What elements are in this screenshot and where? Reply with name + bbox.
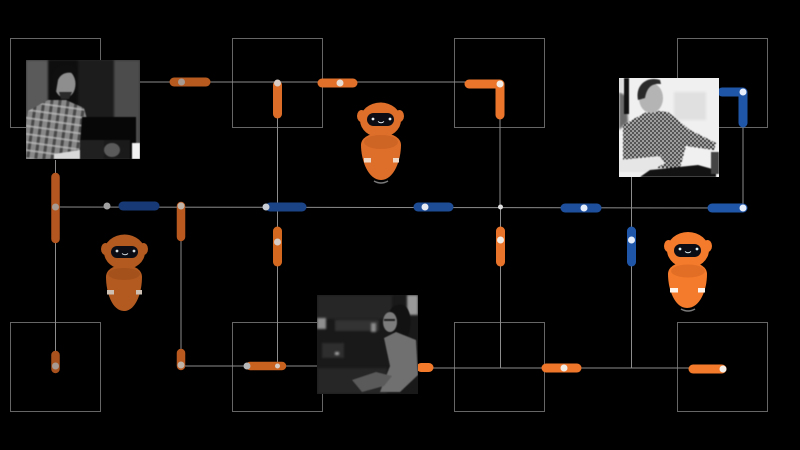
robot body (106, 265, 142, 311)
robot arm marks (107, 290, 142, 294)
robot ear right (703, 240, 712, 252)
robot body (668, 262, 707, 308)
robot ear left (357, 110, 366, 122)
robot: lower right (664, 232, 712, 311)
robot ear right (395, 110, 404, 122)
robot ear right (139, 243, 148, 255)
pill group: orange middle and bottom (278, 231, 722, 369)
connector lines (55, 82, 743, 370)
robot collar shade (671, 264, 705, 278)
robot eyes (679, 248, 698, 250)
network infographic canvas (10, 38, 768, 412)
robot arm marks (364, 158, 399, 162)
robot face visor (367, 113, 394, 126)
robot base (374, 181, 388, 183)
robot collar shade (108, 268, 140, 280)
robot head (667, 232, 709, 268)
robot body (361, 133, 401, 180)
orange and blue connector pills (56, 82, 743, 369)
robot smile (685, 252, 691, 253)
photo: woman at computer in dark room (317, 295, 418, 394)
photo: man in checked shirt (619, 78, 719, 177)
photo: man with laptop (26, 60, 140, 159)
robot ear left (101, 243, 110, 255)
robot: top centre (357, 102, 404, 183)
connector node dots (52, 78, 746, 372)
outlined squares grid (10, 38, 768, 412)
pill group: left column (56, 177, 282, 369)
pill group: top row (174, 82, 500, 115)
robot eyes (116, 250, 135, 252)
robot head (360, 102, 401, 138)
robot arm marks (670, 288, 705, 292)
robot face visor (674, 244, 701, 257)
robot eyes (372, 118, 391, 120)
robot smile (378, 122, 384, 123)
robot face visor (111, 246, 138, 258)
robot: lower left (101, 234, 148, 311)
robot head (104, 234, 145, 270)
pill group: blue (123, 92, 743, 262)
robot smile (122, 254, 128, 255)
robot collar shade (364, 135, 398, 149)
robot ear left (664, 240, 673, 252)
robot base (681, 309, 695, 311)
